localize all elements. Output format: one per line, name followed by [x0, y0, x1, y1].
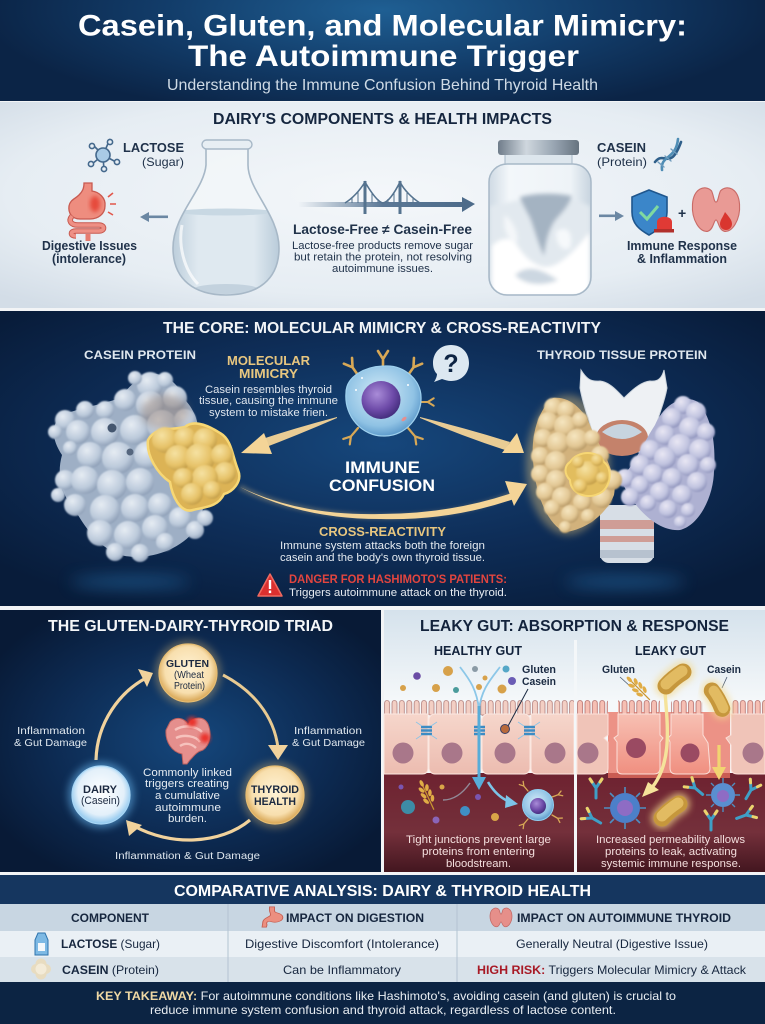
bloodstream — [577, 773, 765, 872]
icon: stomach — [262, 907, 283, 927]
illustration: bridge arrow — [298, 181, 475, 214]
icon: DNA helix — [655, 139, 681, 170]
caption: leaky gut: systemic immune response. — [601, 858, 741, 870]
tight junctions — [416, 722, 540, 739]
panel: molecular mimicry and cross-reactivity — [0, 311, 765, 606]
node: gluten: GLUTEN — [166, 658, 209, 670]
protein bean: casein — [709, 691, 726, 709]
panel: gluten-dairy-thyroid triad — [0, 610, 381, 872]
subtitle: Understanding the Immune Confusion Behind Thyroid Health — [167, 77, 598, 94]
title: The Autoimmune Trigger — [188, 40, 579, 73]
text: key takeaway: reduce immune system confusion and thyroid attack, regardless of lactose content. — [150, 1003, 616, 1017]
arrow: casein leak — [712, 745, 726, 780]
protein bean: gluten — [666, 671, 683, 686]
villi — [577, 700, 765, 716]
caption: leaky gut: Increased permeability allows — [596, 834, 746, 846]
heading: dairy components: DAIRY'S COMPONENTS & HEALTH IMPACTS — [213, 111, 552, 128]
villi — [384, 700, 574, 716]
icon: question bubble: ? — [443, 350, 459, 378]
illustration: jar of casein — [489, 140, 591, 296]
column headers: IMPACT ON DIGESTION — [286, 913, 424, 925]
label: digestive issues — [42, 239, 137, 266]
callout: lactose-free is not casein-free: Lactose-free products remove sugar — [292, 240, 473, 252]
title: Casein, Gluten, and Molecular Mimicry: — [78, 10, 687, 42]
comparison table — [0, 904, 765, 982]
illustration: glass flask of water — [170, 140, 282, 297]
text: immune system attacks — [280, 540, 485, 564]
text: commonly linked triggers: autoimmune — [155, 802, 221, 814]
damaged cells — [577, 714, 765, 774]
panel: header banner — [0, 0, 765, 101]
text: commonly linked triggers: Commonly linked — [143, 767, 232, 779]
callout: danger for Hashimoto's patients: Triggers autoimmune attack on the thyroid. — [289, 587, 507, 599]
arrow: cell to thyroid — [420, 417, 524, 453]
label: left inflammation: Inflammation — [17, 725, 85, 737]
damaged barrier glow — [608, 712, 730, 778]
gold epitope — [148, 423, 239, 511]
label: molecular mimicry — [227, 353, 311, 381]
arrow: gluten to thyroid — [223, 675, 288, 760]
panel: dairy components and health impacts — [0, 102, 765, 308]
label: thyroid tissue protein: THYROID TISSUE PROTEIN — [537, 348, 707, 362]
node: dairy — [68, 762, 134, 828]
row: lactose: Digestive Discomfort (Intolerance) — [245, 937, 439, 951]
text: casein resembles thyroid: Casein resembles thyroid — [205, 384, 332, 396]
arrow: to digestive issues — [140, 212, 168, 222]
icon: thyroid gland with drop — [692, 188, 740, 231]
label: casein: CASEIN — [597, 141, 646, 155]
caption: healthy gut: bloodstream. — [446, 858, 511, 870]
label: molecular mimicry: MIMICRY — [239, 366, 298, 381]
row: lactose — [61, 937, 708, 951]
icon: casein lump — [31, 958, 51, 980]
text: key takeaway — [96, 989, 676, 1017]
arrow: to immune response — [599, 211, 624, 221]
label: casein protein: CASEIN PROTEIN — [84, 348, 196, 362]
node: thyroid health: HEALTH — [254, 796, 296, 808]
panel: leaky gut — [384, 610, 765, 872]
text: casein resembles thyroid — [199, 384, 338, 419]
text: commonly linked triggers — [143, 767, 232, 825]
text: commonly linked triggers: triggers creating — [145, 778, 229, 790]
arrow: curve to immune cell — [443, 782, 518, 808]
callout: lactose-free is not casein-free — [292, 222, 473, 275]
immune cell: left — [604, 787, 646, 829]
gold epitope on thyroid — [566, 453, 610, 496]
row: lactose: LACTOSE (Sugar) — [61, 937, 160, 951]
label: lactose: LACTOSE — [123, 141, 184, 155]
label: casein: (Protein) — [597, 155, 647, 169]
plus sign: + — [678, 205, 686, 221]
cartilage — [580, 370, 667, 456]
icon: milk carton — [35, 933, 48, 955]
node: dairy: (Casein) — [81, 795, 120, 807]
pointers — [620, 677, 727, 688]
text: immune system attacks: Immune system attacks both the foreign — [280, 540, 485, 552]
row: casein — [62, 963, 747, 977]
callout: lactose-free is not casein-free: autoimmune issues. — [332, 263, 433, 275]
icon: wheat in blood — [414, 777, 440, 812]
left lobe — [531, 398, 622, 533]
label: digestive issues: Digestive Issues — [42, 239, 137, 253]
label: lactose — [123, 141, 184, 169]
row: lactose: Generally Neutral (Digestive Issue) — [516, 937, 708, 951]
caption: leaky gut — [596, 834, 746, 870]
column headers — [71, 913, 731, 925]
illustration: thyroid gland — [526, 370, 716, 563]
arrow: blue barrier funnel — [460, 667, 500, 790]
text: immune system attacks: casein and the body's own thyroid tissue. — [280, 552, 485, 564]
illustration: casein protein molecule — [48, 371, 239, 562]
label: left inflammation — [14, 725, 87, 749]
row: casein: Can be Inflammatory — [283, 963, 401, 977]
heading: leaky gut sub: LEAKY GUT — [635, 643, 706, 658]
node: thyroid health — [242, 762, 308, 828]
nuclei — [578, 738, 764, 764]
callout: danger for Hashimoto's patients — [289, 574, 507, 599]
label: immune response — [627, 239, 737, 266]
label: cross-reactivity: CROSS-REACTIVITY — [319, 524, 446, 539]
label: gluten casein: Gluten — [522, 664, 556, 676]
caption: healthy gut: Tight junctions prevent large — [406, 834, 551, 846]
icon: warning triangle — [258, 574, 282, 596]
sub-panel: leaky gut — [577, 643, 765, 872]
node: thyroid health: THYROID — [251, 784, 299, 796]
label: immune response: Immune Response — [627, 239, 737, 253]
divider between gut panels — [574, 640, 577, 872]
immune cell: right — [706, 778, 740, 812]
text: commonly linked triggers: burden. — [168, 813, 207, 825]
blocked particles — [400, 666, 516, 694]
arrow: gluten leak — [642, 692, 667, 797]
label: right inflammation: Inflammation — [294, 725, 362, 737]
arrow: cell to casein — [241, 417, 337, 454]
label: lactose: (Sugar) — [142, 155, 184, 169]
sub-panel: healthy gut — [384, 643, 574, 872]
antibodies — [581, 778, 761, 830]
label: casein: Casein — [707, 664, 741, 676]
caption: healthy gut — [406, 834, 551, 870]
text: commonly linked triggers: a cumulative — [155, 790, 220, 802]
callout: lactose-free is not casein-free: Lactose-Free ≠ Casein-Free — [293, 222, 472, 237]
column headers: IMPACT ON AUTOIMMUNE THYROID — [517, 913, 731, 925]
row: casein: HIGH RISK: Triggers Molecular Mimicry & Attack — [477, 963, 747, 977]
row: casein: CASEIN (Protein) — [62, 963, 159, 977]
icon: stomach and intestine — [69, 183, 116, 241]
node: dairy: DAIRY — [83, 784, 118, 796]
label: gluten: Gluten — [602, 664, 635, 676]
label: immune response: & Inflammation — [637, 252, 727, 266]
heading: comparative analysis: COMPARATIVE ANALYSIS: DAIRY & THYROID HEALTH — [174, 883, 591, 900]
label: right inflammation — [292, 725, 365, 749]
icon: thyroid — [490, 908, 512, 927]
heading: leaky gut: LEAKY GUT: ABSORPTION & RESPONSE — [420, 618, 729, 635]
epithelial cells — [384, 714, 574, 774]
label: digestive issues: (intolerance) — [52, 252, 126, 266]
label: right inflammation: & Gut Damage — [292, 737, 365, 749]
blood particles — [398, 784, 499, 824]
label: gluten casein — [522, 664, 556, 688]
pointer: to trapped particle — [500, 689, 528, 734]
label: casein — [597, 141, 647, 169]
icon: lactose molecule — [88, 139, 120, 172]
node: gluten — [155, 640, 221, 706]
label: molecular mimicry: MOLECULAR — [227, 353, 311, 368]
text: key takeaway: KEY TAKEAWAY: For autoimmune conditions like Hashimoto's, avoiding casein (and gluten) is crucial to — [96, 989, 676, 1003]
node: gluten: Protein) — [174, 680, 205, 692]
panel: key takeaway — [0, 982, 765, 1024]
trachea — [600, 505, 654, 563]
heading: triad: THE GLUTEN-DAIRY-THYROID TRIAD — [48, 618, 333, 635]
panel: comparative analysis — [0, 875, 765, 982]
protein bean: in blood — [662, 803, 679, 818]
label: left inflammation: & Gut Damage — [14, 737, 87, 749]
bloodstream — [384, 773, 574, 872]
icon: inflamed intestines — [166, 717, 210, 764]
heading: the core: THE CORE: MOLECULAR MIMICRY & CROSS-REACTIVITY — [163, 320, 602, 337]
arrow: thyroid to dairy — [126, 820, 250, 840]
label: immune confusion — [329, 458, 435, 495]
arrow: casein to thyroid — [240, 481, 527, 519]
icon: confused immune cell — [343, 351, 434, 444]
column headers: COMPONENT — [71, 913, 149, 925]
caption: leaky gut: proteins to leak, activating — [605, 846, 737, 858]
label: immune confusion: CONFUSION — [329, 476, 435, 495]
caption: healthy gut: proteins from entering — [422, 846, 535, 858]
heading: healthy gut: HEALTHY GUT — [434, 643, 522, 658]
nuclei — [392, 742, 566, 764]
callout: danger for Hashimoto's patients: DANGER FOR HASHIMOTO'S PATIENTS: — [289, 574, 507, 586]
icon: wheat — [622, 672, 655, 705]
icon: shield with alarm — [632, 190, 674, 235]
text: casein resembles thyroid: system to mistake frien. — [209, 407, 328, 419]
arrow: dairy to gluten — [96, 669, 153, 760]
icon: question bubble — [433, 345, 469, 382]
floor glows — [70, 577, 685, 587]
callout: lactose-free is not casein-free: but retain the protein, not resolving — [294, 252, 472, 264]
text: casein resembles thyroid: tissue, causing the immune — [199, 395, 338, 407]
right lobe — [616, 396, 716, 530]
icon: immune cell — [519, 781, 563, 829]
label: gluten casein: Casein — [522, 676, 556, 688]
node: gluten: (Wheat — [174, 669, 204, 681]
title — [78, 10, 687, 73]
label: bottom inflammation: Inflammation & Gut Damage — [115, 850, 260, 862]
label: immune confusion: IMMUNE — [345, 458, 420, 477]
